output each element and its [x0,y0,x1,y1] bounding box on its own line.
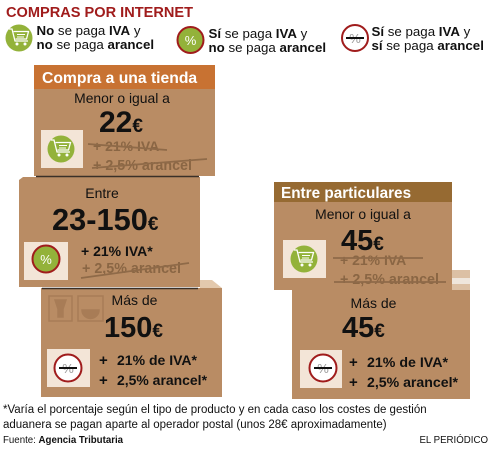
icon: green percent: % [185,33,197,48]
legend: IVA and arancel [342,24,484,53]
struck items: + 21% IVA [93,138,159,154]
items: 21% de IVA* [367,355,449,370]
items: 2,5% arancel* [117,373,208,388]
heading: Entre particulares [274,182,452,202]
items [349,354,459,391]
items: 21% de IVA* [117,353,198,368]
icon tile: percent [24,242,68,280]
struck items: + 2,5% arancel [93,158,192,174]
legend text 2: Sí se paga IVA y [208,26,307,41]
icon: green percent [178,27,204,53]
icon tile: cart [41,130,83,168]
heading: Entre particulares: Entre particulares [281,185,411,202]
icon: green cart [6,24,32,52]
panel: box 23-150 euros [19,176,200,287]
legend text 1: no se paga arancel [36,37,154,52]
icon tile: crossed percent [300,350,342,388]
icon tile: percent: % [40,252,52,267]
footnote: *Varía el porcentaje según el tipo de producto y en cada caso los costes de gestión [3,404,427,416]
items: + [99,352,108,369]
items [99,352,208,389]
legend text 3: sí se paga arancel [372,38,484,53]
footnote: aduanera se pagan aparte al operador postal (unos 28€ aproximadamente) [3,419,387,431]
items: + [99,372,108,389]
items: 2,5% arancel* [367,375,459,390]
amount: 22€ [99,106,143,139]
legend: no IVA, no arancel [6,23,154,52]
label: Menor o igual a [74,90,170,106]
items: + 2,5% arancel [82,261,181,277]
legend: IVA, no arancel [178,26,326,55]
items: + [349,354,358,371]
label: Más de [112,292,158,308]
heading: Compra a una tienda: Compra a una tienda [42,70,197,87]
amount: 45€ [342,312,385,344]
amount: 150€ [104,312,163,344]
icon: crossed percent: % [349,31,361,46]
panel: box 22 euros [34,65,215,176]
heading: Compra a una tienda [34,65,215,89]
icon tile: crossed percent [47,349,90,387]
legend text 2: no se paga arancel [208,40,326,55]
icon tile: crossed percent: % [317,361,329,376]
panel: box 45 euros under [274,182,452,290]
panel: box 150 euros [41,280,222,397]
amount: 45€ [341,225,384,257]
label: Más de [351,295,397,311]
panel: box 45 euros over [292,270,470,399]
icon: crossed percent [342,25,368,51]
label: Menor o igual a [315,206,411,222]
items: + [349,374,358,391]
struck items: + 21% IVA [340,252,406,268]
icon tile: cart [283,240,326,278]
carton symbols [49,296,103,321]
struck items [88,138,207,174]
label: Entre [85,185,119,201]
legend text 3: Sí se paga IVA y [372,24,470,39]
credit: EL PERIÓDICO [419,435,488,446]
amount: 23-150€ [52,202,159,237]
struck items: + 2,5% arancel [340,272,439,288]
legend text 1: No se paga IVA y [36,23,140,38]
icon tile: crossed percent: % [62,361,74,376]
source: Fuente: Agencia Tributaria [3,435,124,446]
title: COMPRAS POR INTERNET [6,5,193,21]
items: + 21% IVA* [81,243,153,259]
items [81,243,189,278]
struck items [333,252,446,288]
